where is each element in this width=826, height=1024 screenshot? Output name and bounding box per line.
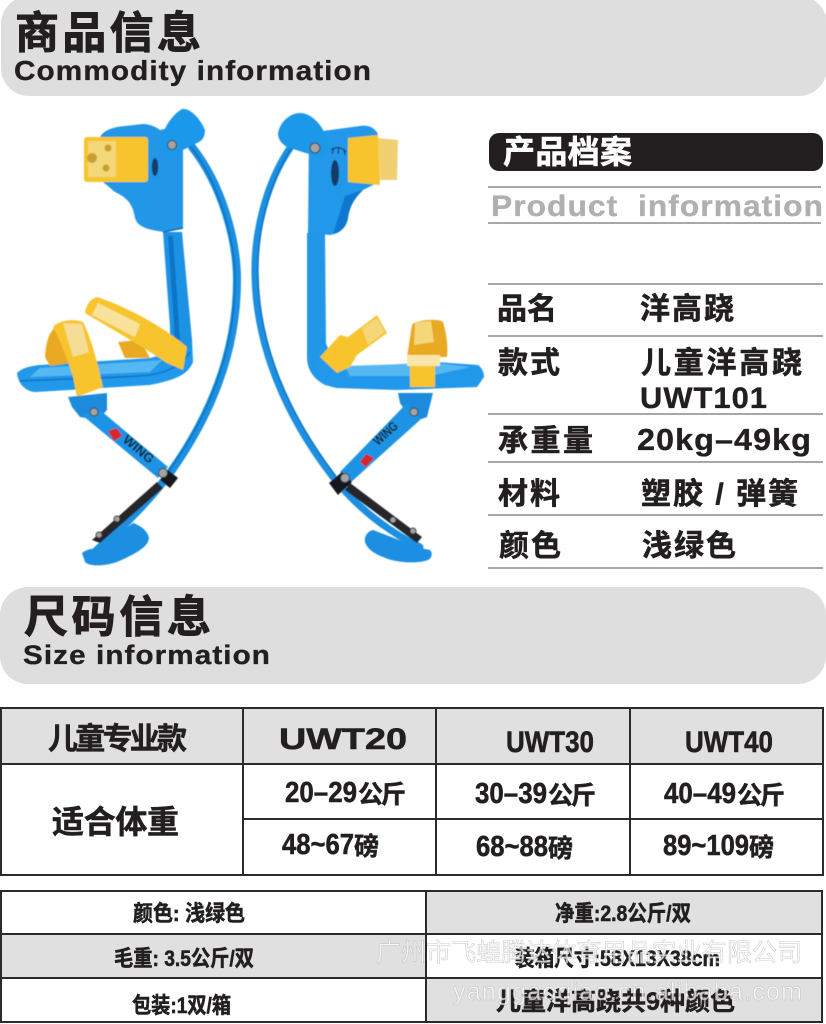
heading bar: product profile: 产品档案 xyxy=(503,134,632,170)
watermark xyxy=(376,939,802,1006)
pound cells: 68~88 xyxy=(476,831,548,863)
cell: packing: 包装:1双/箱 xyxy=(132,993,231,1018)
subheading: Product information: Product information xyxy=(491,190,824,223)
ankle cup and frame xyxy=(100,124,193,362)
row: style: UWT101 xyxy=(640,382,768,415)
watermark: 广州市飞蝗腾达体育用品实业有限公司 xyxy=(376,939,802,967)
cell: net weight: 净重:2.8公斤/双 xyxy=(555,901,691,926)
row: load xyxy=(498,422,812,458)
lower frame bar xyxy=(307,233,337,388)
rear strap xyxy=(85,297,187,370)
watermark: yanggaoqiao.cn.alibaba.com xyxy=(453,978,802,1006)
cell: gross weight: 毛重: 3.5公斤/双 xyxy=(114,946,254,971)
row: style xyxy=(498,347,802,415)
pivot head xyxy=(160,109,205,154)
kilogram cells: 公斤 xyxy=(358,781,406,809)
product photo: right stilt xyxy=(255,113,484,562)
pound cells: 磅 xyxy=(354,833,379,861)
header cells: UWT40 xyxy=(685,726,773,759)
heading: Chinese title: 商品信息 xyxy=(15,9,201,58)
row: load: 承重量 xyxy=(498,425,593,458)
spring bow xyxy=(255,148,420,547)
rubber foot xyxy=(82,523,149,565)
pound cells: 48~67 xyxy=(282,829,354,861)
pivot head xyxy=(278,113,328,157)
rear strap xyxy=(320,315,387,373)
header cells xyxy=(48,723,773,759)
row: name: 洋高跷 xyxy=(640,293,734,326)
cell: colour: 颜色: 浅绿色 xyxy=(133,901,245,926)
ankle cuff xyxy=(348,135,398,185)
kilogram cells: 30–39 xyxy=(475,778,547,810)
header: size information xyxy=(0,587,826,684)
black strip and clip xyxy=(329,472,422,543)
row: material xyxy=(498,478,798,511)
row: load: 20kg–49kg xyxy=(637,422,812,457)
ankle cup xyxy=(308,126,378,235)
product photo: left stilt xyxy=(17,109,237,565)
black strip and clip xyxy=(92,468,178,543)
pound cells: 89~109 xyxy=(663,830,749,862)
kilogram cells: 公斤 xyxy=(548,782,596,810)
heading: Chinese title: 尺码信息 xyxy=(24,593,211,642)
header: commodity information xyxy=(1,0,826,96)
lower arm with logo: WING xyxy=(120,432,157,466)
lower arm with logo: WING xyxy=(370,418,401,448)
foot plate xyxy=(17,344,193,392)
heading: English title: Size information xyxy=(23,640,271,670)
header cells: 儿童专业款 xyxy=(48,723,187,756)
row: material: 塑胶 / 弹簧 xyxy=(641,478,798,511)
row: style: 儿童洋高跷 xyxy=(641,347,802,380)
table: packaging details xyxy=(1,891,822,1022)
heading: English title: Commodity information xyxy=(14,55,372,86)
heading bar: product profile xyxy=(489,133,823,171)
rubber foot xyxy=(365,530,432,562)
row: name: 品名 xyxy=(497,293,557,326)
row: colour xyxy=(499,530,736,563)
lower arm with logo xyxy=(340,393,433,483)
row: style: 款式 xyxy=(498,347,560,380)
pound cells xyxy=(282,829,774,863)
foot plate xyxy=(313,340,484,390)
row: colour: 浅绿色 xyxy=(642,530,736,563)
kilogram cells: 40–49 xyxy=(664,778,736,810)
row label: suitable weight: 适合体重 xyxy=(52,804,179,840)
table: size by weight xyxy=(1,708,823,875)
row: material: 材料 xyxy=(498,478,560,511)
ankle cuff xyxy=(84,137,148,182)
row: name xyxy=(497,293,734,326)
pound cells: 磅 xyxy=(749,834,774,862)
kilogram cells xyxy=(285,777,785,810)
row: colour: 颜色 xyxy=(499,530,561,563)
cell: carton size: 装箱尺寸:58X13X38cm xyxy=(515,946,720,971)
lower arm with logo xyxy=(68,393,168,478)
cell: colour range: 儿童洋高跷共9种颜色 xyxy=(496,988,735,1016)
front strap xyxy=(45,320,103,397)
pound cells: 磅 xyxy=(548,835,573,863)
header cells: UWT30 xyxy=(506,726,594,759)
header cells: UWT20 xyxy=(279,723,407,756)
kilogram cells: 20–29 xyxy=(285,777,357,809)
kilogram cells: 公斤 xyxy=(737,782,785,810)
front strap xyxy=(407,320,447,387)
panel: product profile xyxy=(488,133,824,568)
spring bow xyxy=(97,147,237,550)
